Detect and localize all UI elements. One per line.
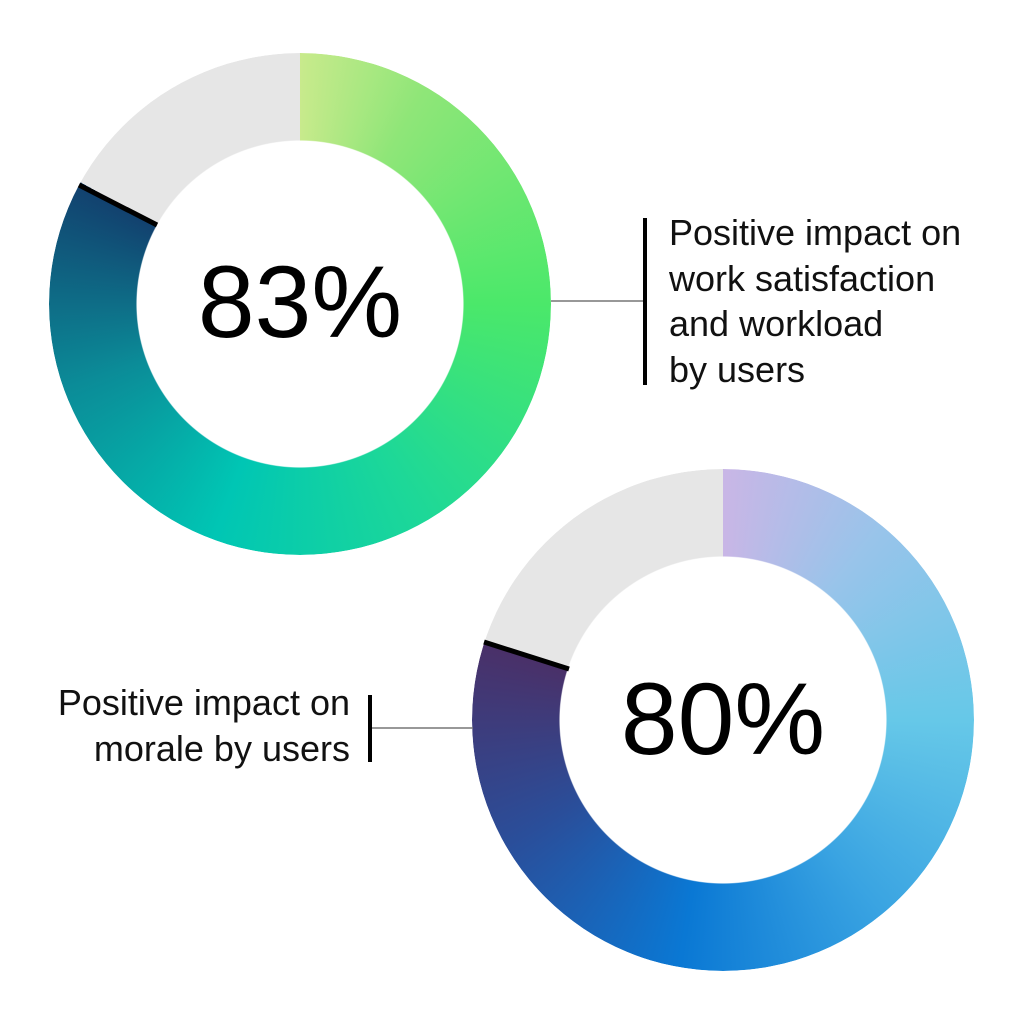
percentage: 83%: 83% (198, 245, 402, 359)
label: morale: morale by users (94, 728, 350, 768)
donut chart: 80% (472, 469, 974, 971)
label: morale (58, 682, 350, 768)
label: work satisfaction: and workload (669, 303, 883, 344)
percentage: 80%: 80% (621, 662, 825, 776)
label: work satisfaction: work satisfaction (669, 258, 935, 298)
label: morale: Positive impact on (58, 682, 350, 723)
label: work satisfaction: by users (669, 348, 805, 390)
donut chart: 83% (49, 53, 551, 555)
label: work satisfaction (669, 212, 961, 390)
label: work satisfaction: Positive impact on (669, 212, 961, 253)
